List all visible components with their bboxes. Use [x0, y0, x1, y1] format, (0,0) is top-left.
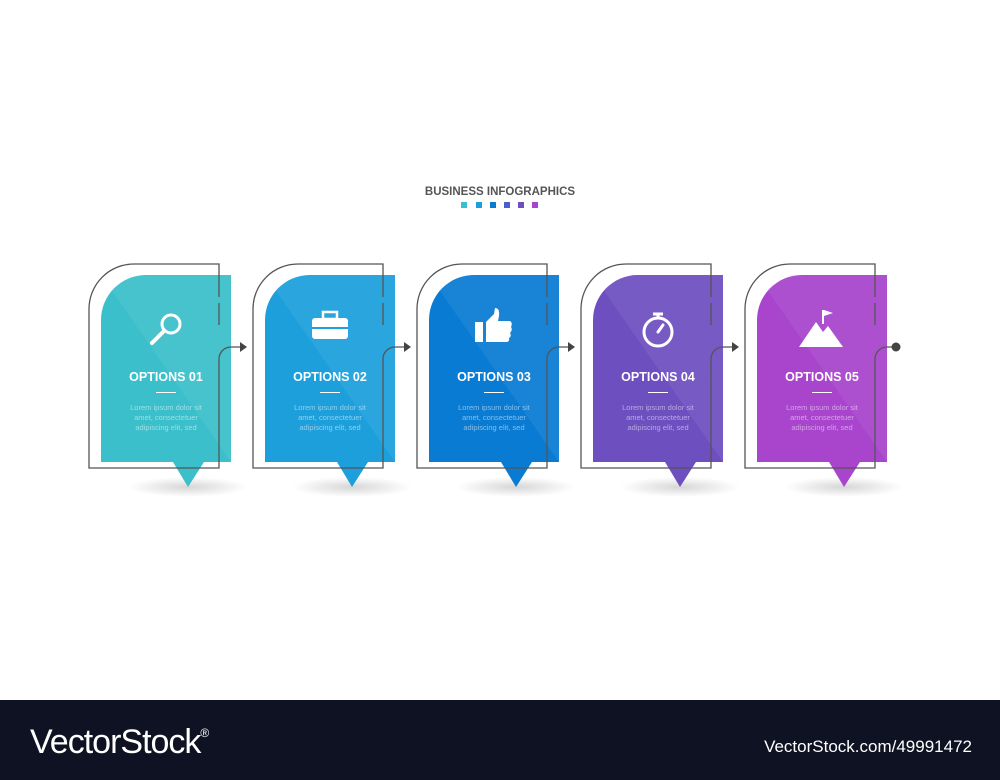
footer bar — [0, 700, 1000, 780]
panel: options 04: Lorem ipsum dolor sit — [622, 403, 695, 412]
panel: options 01: adipiscing elit, sed — [135, 423, 197, 432]
panel: options 03: OPTIONS 03 — [457, 370, 531, 384]
panel: options 03: amet, consectetuer — [462, 413, 526, 422]
panel: options 02: Lorem ipsum dolor sit — [294, 403, 367, 412]
footer bar: VectorStock.com/49991472 — [764, 737, 972, 756]
icon: magnifier — [152, 315, 180, 343]
footer bar: VectorStock — [30, 723, 200, 761]
panel: options 02: adipiscing elit, sed — [299, 423, 361, 432]
panel: options 04 — [581, 264, 740, 497]
title: BUSINESS INFOGRAPHICS — [425, 186, 575, 198]
panel: options 03 — [417, 264, 576, 497]
panel: options 05: OPTIONS 05 — [785, 370, 859, 384]
panel: options 05: amet, consectetuer — [790, 413, 854, 422]
panel: options 01: Lorem ipsum dolor sit — [130, 403, 203, 412]
panel: options 01 — [89, 264, 248, 497]
title — [425, 186, 575, 208]
footer bar: ® — [200, 726, 209, 740]
panel: options 02: OPTIONS 02 — [293, 370, 367, 384]
icon: stopwatch — [644, 314, 672, 346]
panel: options 04: amet, consectetuer — [626, 413, 690, 422]
panel: options 03: adipiscing elit, sed — [463, 423, 525, 432]
panel: options 05: adipiscing elit, sed — [791, 423, 853, 432]
panel: options 05: Lorem ipsum dolor sit — [786, 403, 859, 412]
panel: options 01: amet, consectetuer — [134, 413, 198, 422]
icon: mountain flag — [799, 310, 843, 347]
panel: options 04: OPTIONS 04 — [621, 370, 695, 384]
panel: options 01: OPTIONS 01 — [129, 370, 203, 384]
panel: options 02: amet, consectetuer — [298, 413, 362, 422]
panel: options 02 — [253, 264, 412, 497]
icon: briefcase — [312, 312, 348, 339]
icon: thumbs up — [475, 308, 512, 342]
panel: options 03: Lorem ipsum dolor sit — [458, 403, 531, 412]
panel: options 04: adipiscing elit, sed — [627, 423, 689, 432]
panel: options 05 — [745, 264, 904, 497]
